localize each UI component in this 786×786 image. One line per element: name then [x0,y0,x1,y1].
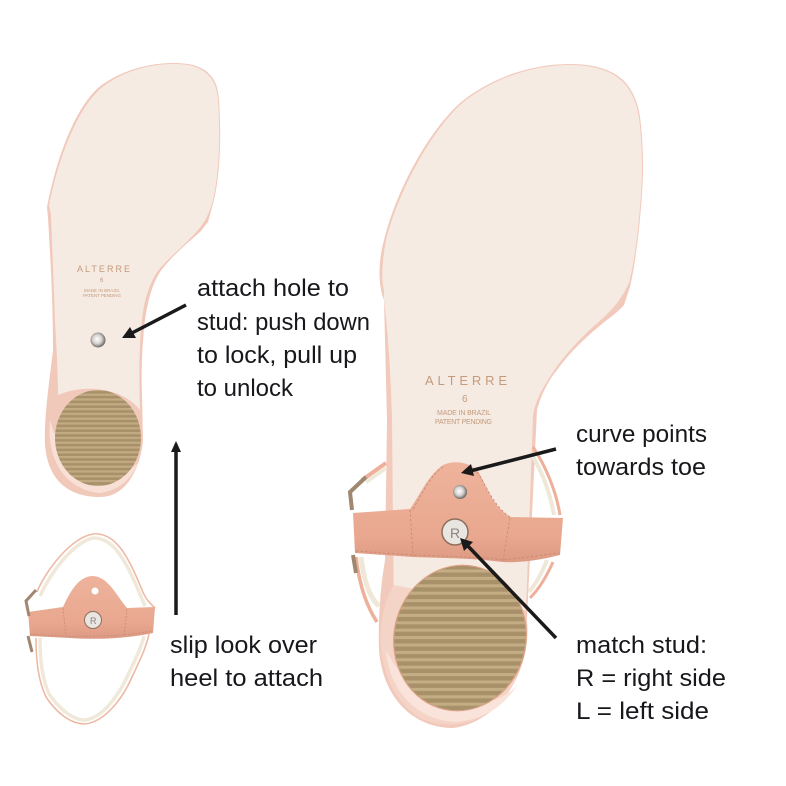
text: match instructions [576,632,726,725]
text: curve instructions [576,421,707,481]
right brand text [425,373,507,426]
left brand text [77,264,130,298]
strap band with tab [28,576,155,639]
right brand text: MADE IN BRAZIL [437,410,491,417]
right strap band with tab [353,462,563,562]
right strap right loop [530,447,560,598]
left heel tread [55,390,141,486]
text: attach instructions: to lock, pull up [197,342,357,369]
right brand text: 6 [462,394,468,405]
arrow: match stud [460,538,556,638]
arrow: slip over heel [171,441,181,615]
text: match instructions: L = left side [576,698,709,725]
left stud [90,332,106,348]
text: slip instructions: slip look over [170,632,317,659]
right pink heel [381,585,515,724]
text: attach instructions: to unlock [197,375,294,402]
text: attach instructions: attach hole to [197,275,349,302]
strap buckle [26,590,36,652]
right strap R stud [442,519,468,545]
right brand text: PATENT PENDING [435,419,492,426]
text: match instructions: R = right side [576,665,726,692]
text: attach instructions [197,275,370,402]
arrow: hole to stud [122,305,186,338]
right heel inner light [386,650,517,722]
text: attach instructions: stud: push down [197,309,370,336]
strap upper loop [37,534,155,608]
right strap R stud: R [450,525,460,541]
left sole pink edge [45,63,220,497]
right sole cream [382,65,642,620]
right sole pink edge [379,64,643,728]
right strap left loop [362,463,386,480]
left sole cream [49,64,219,410]
right strap stud [453,485,467,499]
strap stitching [30,608,152,637]
left heel inner light [49,420,138,493]
strap R stud: R [90,616,97,626]
left brand text: ALTERRE [77,264,130,274]
strap hole [92,588,98,594]
text: slip instructions: heel to attach [170,665,323,692]
arrow: curve points [461,449,556,476]
left brand text: 6 [100,278,104,284]
left brand text: MADE IN BRAZIL [84,288,120,293]
strap lower loop [36,634,149,724]
right strap stitching [356,467,559,561]
text: match instructions: match stud: [576,632,707,659]
text: curve instructions: curve points [576,421,707,448]
strap R stud [84,612,102,628]
right shoe strap [350,447,563,622]
right heel tread [380,553,540,723]
right brand text: ALTERRE [425,373,507,388]
left brand text: PATENT PENDING [83,293,121,298]
left shoe sole [45,63,220,497]
text: curve instructions: towards toe [576,454,706,481]
right strap buckle [350,477,366,573]
detached heel strap [26,534,155,724]
right shoe sole [379,64,643,728]
text: slip instructions [170,632,323,692]
